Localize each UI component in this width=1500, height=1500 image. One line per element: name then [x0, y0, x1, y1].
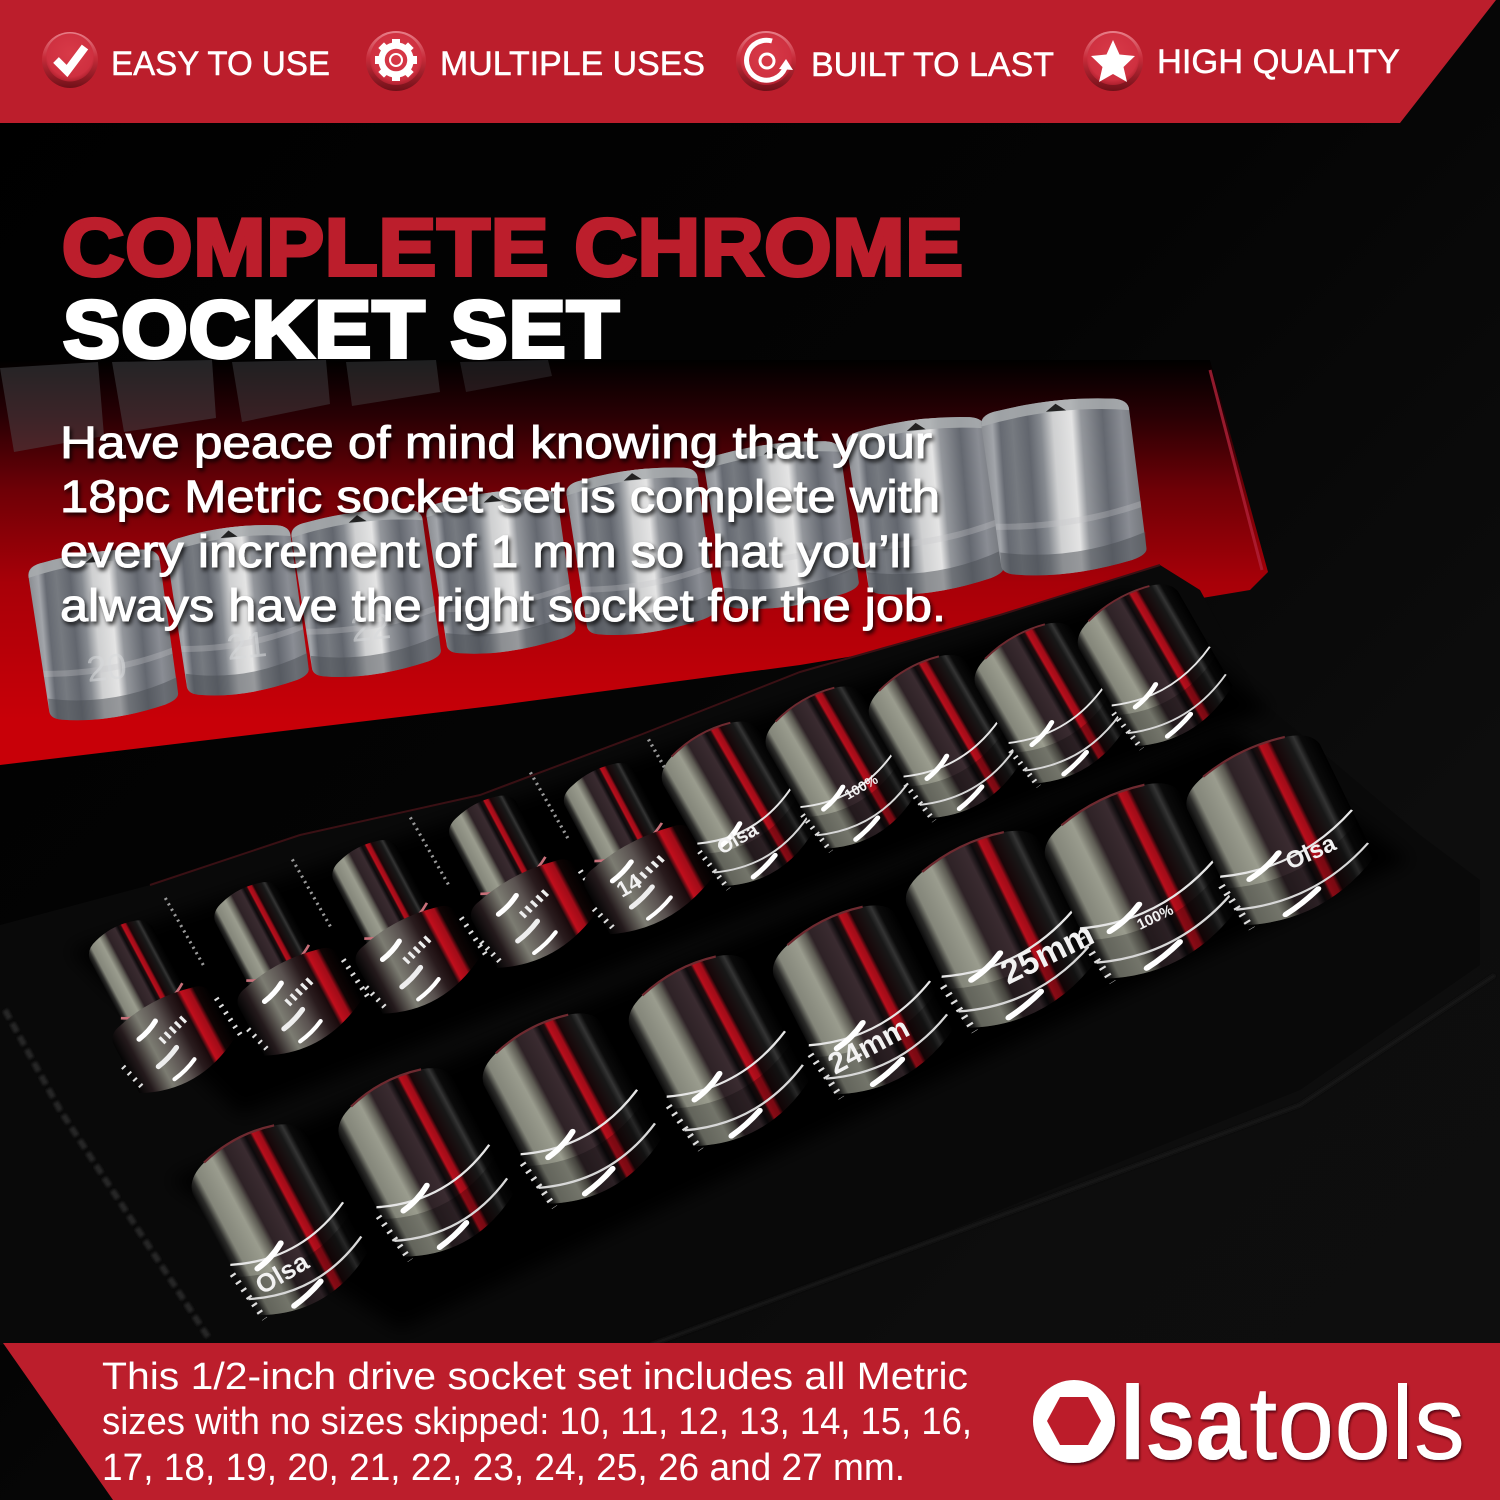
title — [62, 203, 964, 375]
body description: always have the right socket for the job. — [60, 580, 946, 631]
sizes description: 17, 18, 19, 20, 21, 22, 23, 24, 25, 26 and 27 mm. — [102, 1447, 905, 1489]
faint size engravings on lid sockets — [85, 605, 393, 690]
faint size engravings on lid sockets: 21 — [225, 623, 269, 668]
faint size engravings on lid sockets: 20 — [85, 645, 129, 690]
engraved socket markings: 100% — [842, 771, 881, 803]
top feature banner — [0, 0, 1496, 123]
logo: Olsatools: tools — [1249, 1365, 1465, 1482]
icon: gear — [366, 31, 426, 91]
sizes description: This 1/2-inch drive socket set includes all Metric — [102, 1356, 968, 1398]
engraved socket markings: 24mm — [823, 1011, 915, 1081]
body description: 18pc Metric socket set is complete with — [60, 471, 940, 522]
title: SOCKET SET — [63, 285, 620, 375]
body description: every increment of 1 mm so that you’ll — [60, 526, 912, 577]
feature: built to last — [736, 31, 1054, 91]
engraved socket markings — [250, 771, 1341, 1300]
engraved socket markings: 25mm — [995, 915, 1100, 992]
socket pockets — [70, 590, 1270, 1115]
red case lid — [0, 360, 1268, 765]
engraved socket markings: 14 — [612, 868, 646, 902]
lid sockets — [27, 395, 1148, 724]
title: COMPLETE CHROME — [62, 203, 964, 293]
feature: easy to use — [42, 32, 330, 88]
icon: star — [1083, 31, 1143, 91]
body description: Have peace of mind knowing that your — [60, 417, 932, 468]
sizes description — [102, 1356, 972, 1489]
feature: high quality: HIGH QUALITY — [1157, 43, 1400, 81]
body description — [60, 417, 946, 631]
icon: check mark — [42, 32, 98, 88]
engraved socket markings: 100% — [1134, 901, 1176, 934]
lower row of sockets — [177, 720, 1383, 1331]
logo: Olsatools: lsa — [1120, 1365, 1247, 1482]
logo: Olsatools — [1031, 1360, 1465, 1487]
feature: multiple uses — [366, 31, 705, 91]
feature: high quality — [1083, 31, 1400, 91]
photo: open socket case — [0, 360, 1495, 1345]
feature: multiple uses: MULTIPLE USES — [440, 45, 705, 83]
feature: easy to use: EASY TO USE — [111, 45, 330, 83]
logo: Olsatools: O — [1031, 1360, 1117, 1487]
engraved socket markings: Olsa — [250, 1246, 314, 1300]
dim upper row of lid sockets — [0, 360, 552, 452]
engraved socket markings: Olsa — [714, 818, 763, 859]
feature: built to last: BUILT TO LAST — [811, 46, 1054, 84]
faint size engravings on lid sockets: 22 — [349, 605, 393, 650]
black foam tray — [0, 565, 1495, 1345]
upper row of sockets — [62, 571, 1241, 1105]
sizes description: sizes with no sizes skipped: 10, 11, 12, 13, 14, 15, 16, — [102, 1401, 972, 1443]
engraved socket markings: Olsa — [1281, 829, 1341, 875]
icon: cycle gear — [736, 31, 796, 91]
bottom banner — [3, 1343, 1500, 1500]
